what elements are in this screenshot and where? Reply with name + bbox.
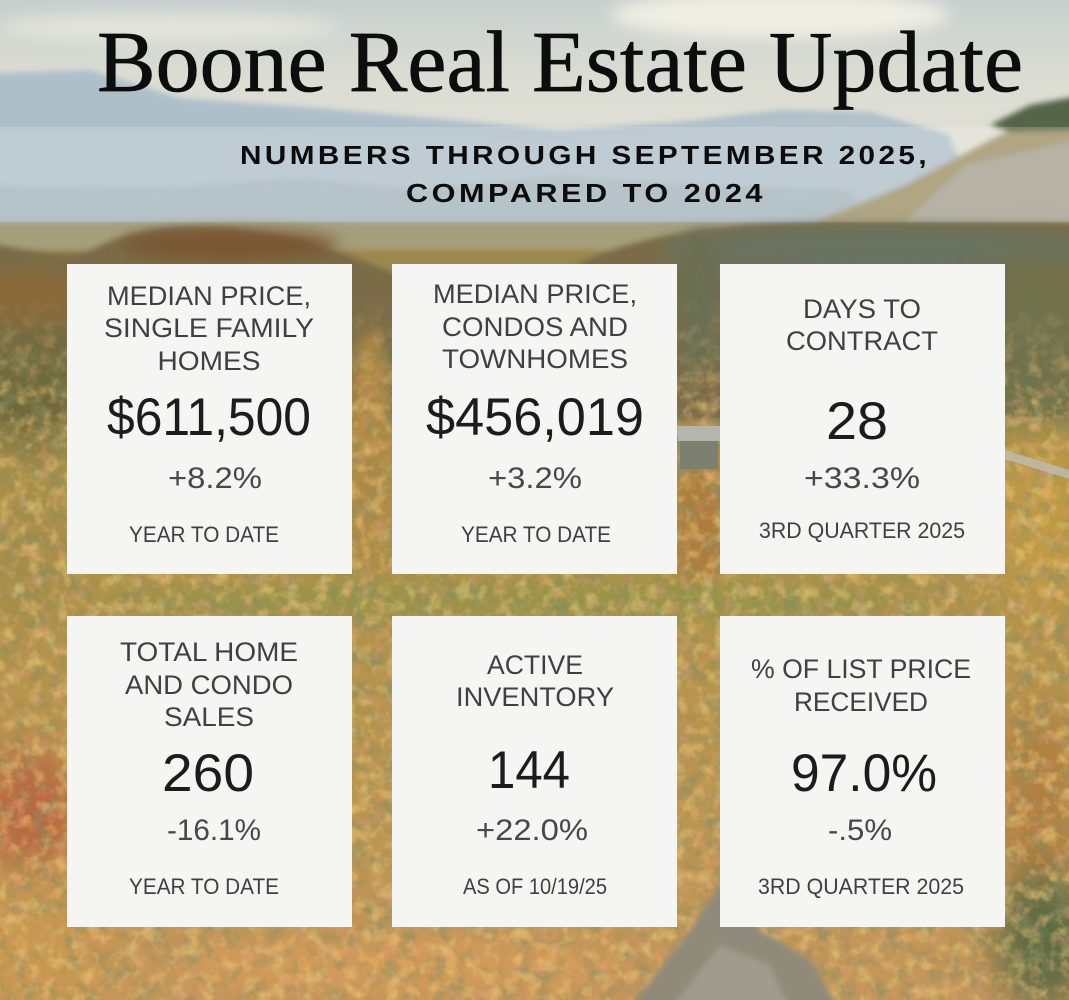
panel: median price single family homes [67,264,352,574]
title: Boone Real Estate Update [97,13,1023,110]
panel: median price single family homes: $611,500 [107,388,311,447]
panel: median price condos and townhomes: $456,019 [426,388,644,447]
panel: days to contract: 28 [826,392,888,451]
panel: active inventory: AS OF 10/19/25 [463,874,607,899]
panel: active inventory: 144 [488,741,570,800]
panel: percent of list price received: -.5% [828,814,892,847]
panel: median price single family homes: SINGLE FAMILY [104,313,314,343]
panel: percent of list price received: 3RD QUARTER 2025 [758,874,964,899]
panel: total home and condo sales: 260 [162,744,254,803]
panel: days to contract: CONTRACT [786,326,938,356]
panel: active inventory: ACTIVE [487,650,583,680]
panel: total home and condo sales: AND CONDO [125,670,293,700]
panel: days to contract: DAYS TO [803,294,921,324]
panel: total home and condo sales: YEAR TO DATE [129,874,279,899]
panel: percent of list price received: RECEIVED [794,687,928,717]
panel: active inventory: +22.0% [476,814,588,847]
panel: median price condos and townhomes: +3.2% [488,462,582,495]
panel: median price condos and townhomes [392,264,677,574]
panel: days to contract: +33.3% [804,462,920,495]
subtitle [240,140,930,208]
panel: percent of list price received: 97.0% [791,744,937,803]
panel: median price condos and townhomes: CONDOS AND [442,312,628,342]
panel: percent of list price received [720,616,1005,927]
panel: median price single family homes: +8.2% [168,462,262,495]
panel: median price condos and townhomes: MEDIAN PRICE, [433,279,637,309]
panel: median price condos and townhomes: YEAR TO DATE [461,522,611,547]
panel: total home and condo sales: -16.1% [167,814,261,847]
panel: median price condos and townhomes: TOWNHOMES [442,344,628,374]
panel: total home and condo sales: SALES [164,702,254,732]
panel: median price single family homes: YEAR TO DATE [129,522,279,547]
panel: active inventory [392,616,677,927]
panel: median price single family homes: MEDIAN PRICE, [107,281,311,311]
panel: median price single family homes: HOMES [158,346,260,376]
panel: total home and condo sales: TOTAL HOME [120,637,298,667]
subtitle: COMPARED TO 2024 [406,178,766,208]
panel: days to contract: 3RD QUARTER 2025 [759,518,965,543]
panel: days to contract [720,264,1005,574]
panel: total home and condo sales [67,616,352,927]
panel: active inventory: INVENTORY [456,682,614,712]
subtitle: NUMBERS THROUGH SEPTEMBER 2025, [240,140,930,170]
panel: percent of list price received: % OF LIST PRICE [751,654,971,684]
